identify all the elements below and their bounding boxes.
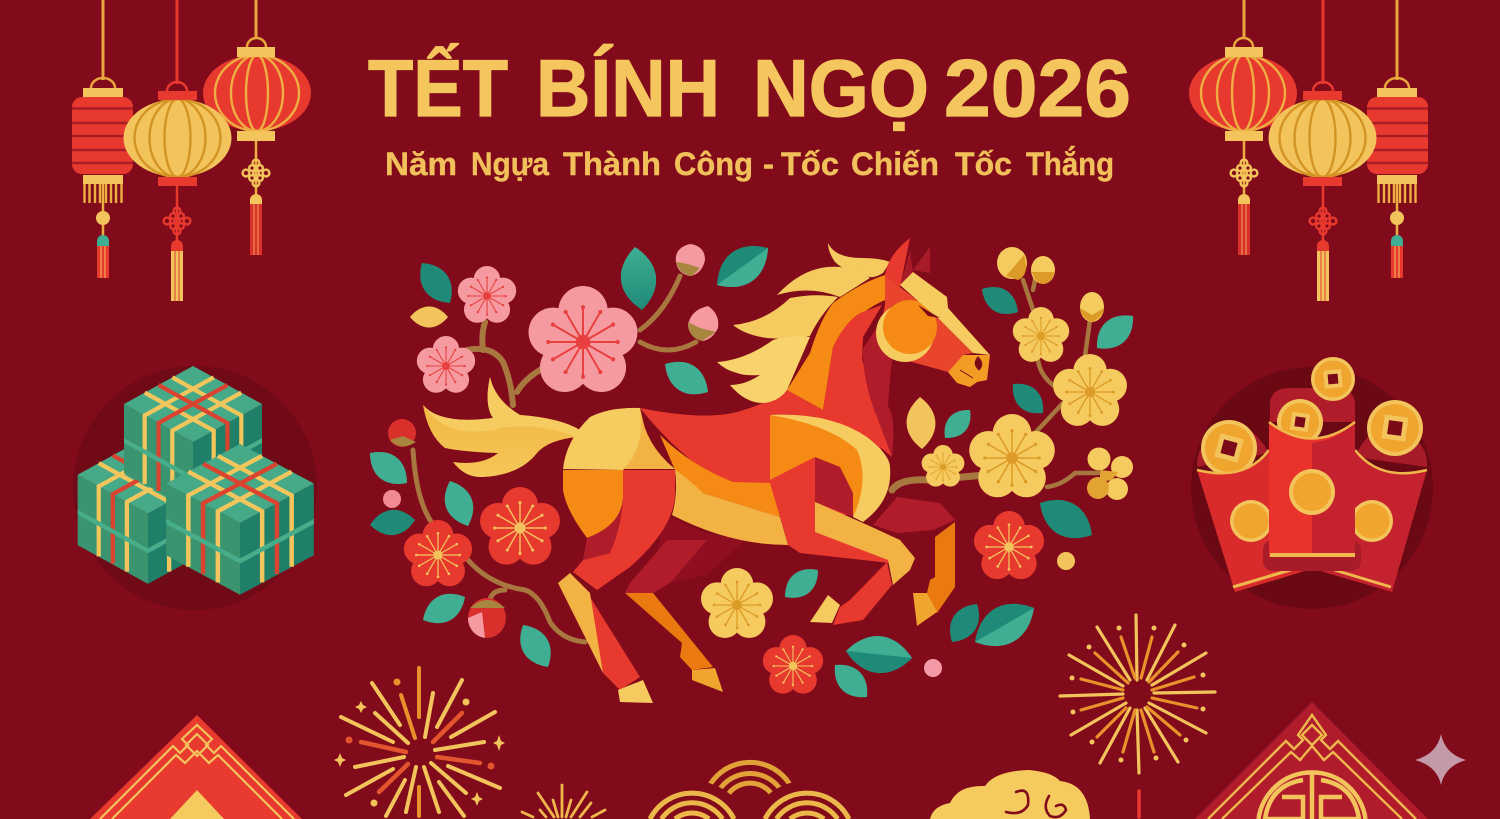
panel: red envelopes with coins — [1191, 357, 1433, 609]
subtitle: Công — [674, 146, 753, 182]
horse — [423, 238, 990, 703]
firework left sparks — [334, 678, 505, 806]
firework: small bottom — [522, 785, 605, 817]
subtitle: Chiến — [851, 146, 939, 182]
falling coin — [1311, 357, 1355, 401]
blossoms: yellow — [701, 307, 1127, 638]
blossom: half open yellow — [1087, 448, 1133, 500]
title: 2026 — [944, 44, 1131, 134]
subtitle: Năm — [385, 146, 457, 182]
lanterns: right group — [1189, 0, 1428, 301]
dots — [383, 490, 1075, 677]
far front leg — [873, 497, 955, 626]
title: NGỌ — [753, 44, 929, 134]
tail — [423, 377, 580, 477]
title: TẾT — [368, 43, 508, 134]
subtitle: Ngựa — [471, 146, 549, 182]
banh chung top — [124, 366, 262, 511]
near front leg — [770, 457, 915, 625]
lanterns: left group — [72, 0, 311, 301]
banh chung left — [78, 436, 218, 584]
panel: banh chung stack — [73, 366, 317, 610]
blossoms: red — [404, 487, 1044, 694]
title — [368, 43, 1131, 134]
shoulder — [770, 415, 890, 522]
center envelope — [1263, 388, 1361, 571]
subtitle: - — [763, 146, 774, 182]
neck — [787, 275, 893, 457]
firework: left — [341, 668, 500, 816]
firework right sparks — [1070, 626, 1206, 762]
banh chung right — [166, 444, 314, 595]
golden cloud — [930, 770, 1090, 819]
rump — [563, 408, 675, 590]
firework: right — [1060, 615, 1215, 773]
head — [876, 238, 990, 387]
mane — [717, 243, 890, 403]
body bands — [640, 390, 890, 545]
buds — [388, 244, 1104, 638]
left envelope — [1197, 420, 1308, 592]
title: BÍNH — [536, 43, 720, 134]
blossoms: pink — [417, 266, 637, 393]
leaves — [362, 234, 1142, 706]
subtitle: Tốc — [955, 146, 1012, 182]
right envelope — [1317, 400, 1427, 592]
subtitle: Thắng — [1026, 146, 1114, 182]
branches — [413, 275, 1098, 642]
bottom-left diamond decoration — [90, 715, 302, 819]
subtitle: Tốc — [781, 146, 839, 182]
sparkle watermark — [1415, 734, 1466, 785]
bottom-right diamond decoration — [1195, 702, 1428, 819]
far rear leg — [625, 515, 745, 692]
firecracker fuse — [1137, 791, 1141, 817]
gold wave arcs — [636, 762, 863, 819]
near rear leg — [558, 573, 653, 703]
subtitle: Thành — [563, 146, 661, 182]
subtitle — [385, 146, 1114, 182]
